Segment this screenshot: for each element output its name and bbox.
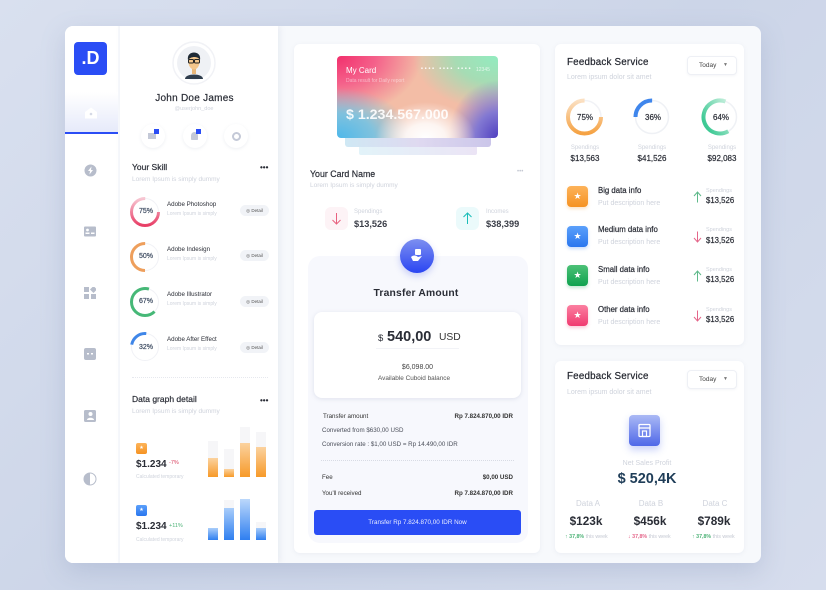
bar chart: orange — [208, 427, 266, 477]
skill: after effect: Adobe After Effect — [167, 336, 217, 342]
list item: other data: Other data info — [598, 304, 650, 314]
data stat: orange: ★ — [139, 445, 144, 451]
amount box: $ — [378, 333, 383, 344]
skill: indesign: Adobe Indesign — [167, 246, 210, 252]
amount box: Available Cuboid balance — [378, 375, 450, 382]
donut charts — [566, 98, 737, 136]
transfer details — [321, 413, 514, 496]
list item: medium data: ★ — [573, 230, 582, 240]
stat: spendings: $13,526 — [354, 219, 387, 229]
list item: medium data: $13,526 — [706, 236, 734, 244]
data stat: orange: $1.234 — [136, 458, 167, 470]
skill: photoshop: 75% — [139, 208, 153, 215]
credit card: My Card — [346, 66, 376, 75]
icon: transfer hand — [400, 239, 434, 273]
data stat: blue: Calculated temporary — [136, 537, 184, 543]
card stack layer middle — [345, 130, 491, 147]
stat: spendings — [325, 207, 387, 230]
text: Lorem Ipsum is simply dummy — [310, 182, 398, 189]
data b — [628, 499, 671, 540]
panel: feedback service bottom — [555, 361, 744, 553]
card stack layer back — [359, 140, 477, 155]
data b: $456k — [634, 514, 666, 528]
net sales profit: Net Sales Profit — [623, 460, 671, 467]
stat: 75 percent: 75% — [577, 112, 593, 122]
nav icon: bolt — [84, 164, 96, 176]
list item: small data — [565, 264, 734, 290]
active nav item: home — [65, 92, 118, 134]
skill: after effect: 32% — [139, 344, 153, 351]
data graph heading: Data graph detail — [132, 394, 197, 404]
skill: indesign: ◎ Detail — [246, 253, 263, 258]
list item: small data: ★ — [573, 270, 582, 280]
list item: big data — [566, 186, 734, 210]
data stat: orange: Calculated temporary — [136, 474, 184, 480]
data c: Data C — [703, 499, 727, 508]
skill: after effect — [139, 336, 269, 353]
text: Lorem ipsum dolor sit amet — [567, 74, 651, 81]
text: Lorem ipsum dolor sit amet — [567, 388, 651, 396]
sidebar navigation — [65, 26, 118, 563]
skill: illustrator: Lorem Ipsum is simply — [167, 301, 217, 307]
list item: small data: $13,526 — [706, 275, 734, 284]
profile action: settings — [224, 124, 248, 148]
dropdown: today: ▼ — [723, 62, 728, 68]
dropdown: today — [687, 56, 737, 75]
data a: Data A — [576, 499, 600, 508]
skill: illustrator: 67% — [139, 298, 153, 305]
nav icon: apps — [84, 287, 96, 299]
list item: small data: Put description here — [598, 278, 660, 286]
data stat: orange: -7% — [169, 460, 179, 466]
feedback heading: Feedback Service — [567, 371, 649, 382]
text: Lorem Ipsum is simply dummy — [132, 176, 220, 183]
data a: ↑ 37,8% this week — [565, 534, 608, 540]
skill rings — [130, 197, 160, 361]
nav icon: id card — [84, 226, 96, 236]
list item: big data: $13,526 — [706, 196, 734, 205]
data c: $789k — [698, 514, 730, 528]
skill: indesign: Lorem Ipsum is simply — [167, 256, 217, 262]
list item: other data: $13,526 — [706, 315, 734, 324]
stat: incomes: $38,399 — [486, 219, 519, 229]
stat: 36 percent: 36% — [645, 112, 661, 122]
skill: after effect: ◎ Detail — [246, 344, 263, 350]
amount box: $6,098.00 — [402, 364, 433, 370]
dropdown: today: Today — [699, 376, 716, 383]
panel: card and transfer — [294, 44, 540, 553]
stat: 36 percent: Spendings — [638, 145, 666, 151]
data stat: blue: ★ — [139, 507, 144, 513]
transfer button — [314, 510, 521, 535]
skill: photoshop: Adobe Photoshop — [167, 200, 216, 208]
net sales value: $ 520,4K — [618, 470, 676, 486]
dropdown: today: ▼ — [723, 376, 728, 382]
list item: small data: Spendings — [706, 266, 732, 272]
amount box: USD — [439, 332, 461, 342]
list item: medium data: Put description here — [598, 239, 660, 246]
transfer details: You'll received — [322, 490, 361, 496]
your skill heading: Your Skill — [132, 162, 167, 172]
stat: incomes: Incomes — [486, 209, 509, 215]
list item: big data: Big data info — [598, 186, 641, 194]
stat: 36 percent: $41,526 — [638, 154, 666, 162]
dropdown: today — [687, 370, 737, 389]
profile column background — [120, 26, 278, 563]
icon: store — [629, 415, 660, 446]
amount box — [314, 312, 521, 398]
skill: indesign — [139, 246, 269, 262]
list item: big data: ★ — [573, 191, 582, 201]
transfer details: Rp 7.824.870,00 IDR — [455, 413, 513, 420]
stat: 36 percent — [638, 112, 666, 162]
stat: 64 percent — [708, 112, 736, 162]
stat: 75 percent: $13,563 — [571, 154, 599, 162]
profile action: gallery — [141, 124, 165, 148]
avatar — [172, 42, 216, 84]
transfer details: Fee — [322, 474, 333, 480]
data stat: blue: +11% — [169, 523, 183, 529]
data c — [692, 499, 735, 540]
stat: 64 percent: $92,083 — [708, 154, 736, 162]
amount box: 540,00 — [387, 328, 431, 344]
data a — [565, 499, 608, 540]
transfer button: Transfer Rp 7.824.870,00 IDR Now — [368, 519, 467, 526]
list item: other data — [566, 304, 734, 330]
nav icon: contrast — [84, 472, 96, 486]
list item: other data: ★ — [573, 310, 582, 320]
logo: .D — [82, 48, 100, 68]
skill: after effect: Lorem Ipsum is simply — [167, 346, 217, 352]
nav icon: inbox — [84, 348, 96, 360]
menu dots: ••• — [260, 163, 268, 172]
stat: incomes — [456, 207, 519, 230]
stat: 64 percent: 64% — [713, 112, 729, 122]
list item: big data: Put description here — [598, 200, 660, 206]
transfer panel — [308, 256, 528, 543]
feedback heading: Feedback Service — [567, 57, 649, 68]
list item: small data: Small data info — [598, 264, 650, 274]
list item: big data: Spendings — [706, 188, 732, 194]
list item: other data: Put description here — [598, 318, 660, 326]
skill: illustrator: Adobe Illustrator — [167, 290, 212, 298]
profile action: notifications — [183, 124, 207, 148]
data a: $123k — [570, 514, 602, 528]
dashboard panel — [65, 26, 761, 563]
data b: Data B — [639, 499, 663, 508]
card name heading: Your Card Name — [310, 169, 375, 179]
skill: photoshop: Lorem Ipsum is simply — [167, 211, 217, 217]
credit card: 12345 — [476, 67, 490, 73]
data c: ↑ 37,8% this week — [692, 534, 735, 540]
transfer details: Conversion rate : $1,00 USD = Rp 14.490,00 IDR — [322, 441, 458, 448]
data stat: orange — [136, 443, 184, 480]
panel: feedback service top — [555, 44, 744, 345]
list item: medium data: Spendings — [706, 227, 732, 233]
skill: indesign: 50% — [139, 253, 153, 260]
logo — [74, 42, 107, 75]
data b: ↓ 37,8% this week — [628, 534, 671, 540]
skill: photoshop: ◎ Detail — [246, 208, 263, 213]
menu dots: ••• — [517, 169, 523, 175]
credit card — [337, 56, 498, 138]
transfer details: $0,00 USD — [483, 474, 513, 480]
list item: medium data — [566, 225, 734, 250]
credit card: Data result for Daily report — [346, 78, 404, 84]
transfer amount heading: Transfer Amount — [373, 288, 459, 298]
text: Lorem Ipsum is simply dummy — [132, 408, 220, 415]
stat: 75 percent: Spendings — [571, 145, 599, 151]
menu dots: ••• — [260, 396, 268, 405]
transfer details: Converted from $630,00 USD — [322, 427, 404, 434]
profile handle: @userjohn_doe — [175, 106, 213, 112]
list item: other data: Spendings — [706, 306, 732, 312]
credit card: $ 1.234.567.000 — [346, 107, 449, 123]
dropdown: today: Today — [699, 62, 716, 69]
stat: 64 percent: Spendings — [708, 145, 736, 151]
profile name: John Doe James — [155, 92, 234, 104]
credit card: •••• •••• •••• — [421, 66, 472, 72]
skill: photoshop — [139, 200, 269, 217]
list item: medium data: Medium data info — [598, 225, 658, 234]
transfer details: Transfer amount — [323, 413, 368, 420]
skill: illustrator: ◎ Detail — [246, 299, 263, 304]
bar chart: blue — [208, 499, 266, 540]
stat: spendings: Spendings — [354, 209, 382, 215]
data stat: blue — [136, 505, 184, 543]
nav icon: contact — [84, 410, 96, 422]
data stat: blue: $1.234 — [136, 520, 167, 532]
stat: 75 percent — [570, 112, 600, 162]
skill: illustrator — [139, 290, 269, 307]
transfer details: Rp 7.824.870,00 IDR — [455, 490, 513, 496]
